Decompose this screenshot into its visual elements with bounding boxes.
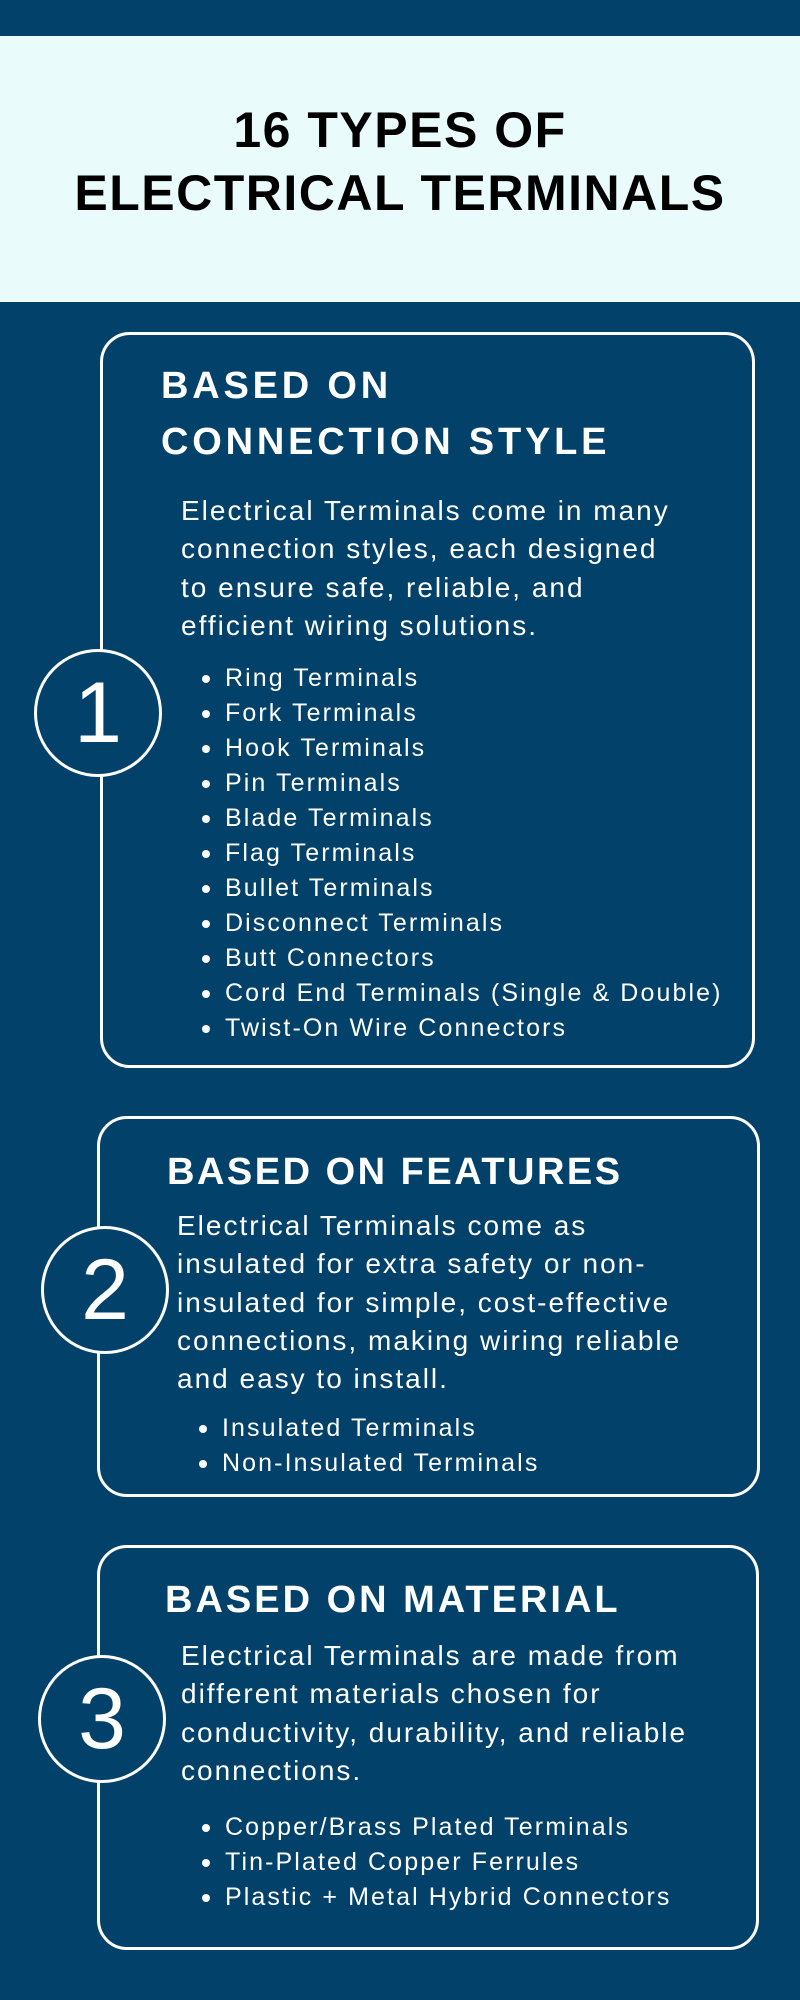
list: Flag Terminals — [225, 839, 416, 867]
description: connection styles, each designed — [181, 533, 658, 564]
list: Fork Terminals — [225, 699, 418, 727]
description: efficient wiring solutions. — [181, 610, 538, 641]
description: connections, making wiring reliable — [177, 1325, 681, 1356]
list — [202, 664, 723, 1042]
icon: number 1: 1 — [74, 665, 122, 761]
description: Electrical Terminals are made from — [181, 1640, 680, 1671]
list — [202, 1813, 672, 1911]
description: different materials chosen for — [181, 1678, 602, 1709]
icon: number 1 — [34, 649, 162, 777]
list: Blade Terminals — [225, 804, 434, 832]
list: Disconnect Terminals — [225, 909, 504, 937]
description: connections. — [181, 1755, 362, 1786]
description: and easy to install. — [177, 1363, 449, 1394]
heading: BASED ON FEATURES — [167, 1151, 623, 1193]
list — [199, 1414, 539, 1477]
panel: material — [97, 1545, 759, 1950]
icon: number 2 — [41, 1226, 169, 1354]
description: Electrical Terminals come as — [177, 1210, 587, 1241]
panel: connection style — [100, 332, 755, 1068]
list: Hook Terminals — [225, 734, 426, 762]
list: Pin Terminals — [225, 769, 402, 797]
list: Tin-Plated Copper Ferrules — [225, 1848, 580, 1876]
list: Ring Terminals — [225, 664, 419, 692]
icon: number 3 — [38, 1655, 166, 1783]
heading — [161, 365, 610, 463]
title: 16 TYPES OF — [233, 102, 567, 158]
list: Insulated Terminals — [222, 1414, 477, 1442]
description: Electrical Terminals come in many — [181, 495, 670, 526]
description — [181, 1640, 687, 1786]
heading: CONNECTION STYLE — [161, 421, 610, 463]
list: Butt Connectors — [225, 944, 436, 972]
panel: features — [97, 1116, 760, 1497]
title — [74, 102, 726, 221]
description: conductivity, durability, and reliable — [181, 1717, 687, 1748]
icon: number 3: 3 — [78, 1671, 126, 1767]
list: Copper/Brass Plated Terminals — [225, 1813, 630, 1841]
title: ELECTRICAL TERMINALS — [74, 165, 726, 221]
heading: BASED ON — [161, 365, 392, 407]
description: insulated for extra safety or non- — [177, 1248, 647, 1279]
description: to ensure safe, reliable, and — [181, 572, 585, 603]
list: Cord End Terminals (Single & Double) — [225, 979, 723, 1007]
header panel — [0, 36, 800, 302]
description: insulated for simple, cost-effective — [177, 1287, 670, 1318]
list: Bullet Terminals — [225, 874, 435, 902]
list: Twist-On Wire Connectors — [225, 1014, 567, 1042]
heading: BASED ON MATERIAL — [165, 1579, 621, 1621]
list: Plastic + Metal Hybrid Connectors — [225, 1883, 672, 1911]
list: Non-Insulated Terminals — [222, 1449, 539, 1477]
description — [177, 1210, 681, 1394]
description — [181, 495, 670, 641]
icon: number 2: 2 — [81, 1242, 129, 1338]
